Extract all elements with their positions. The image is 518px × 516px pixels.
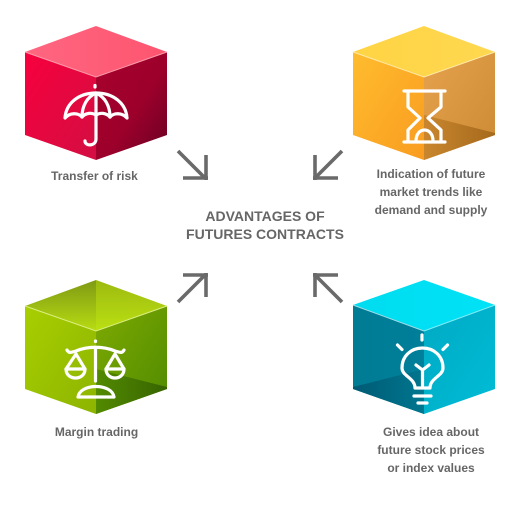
label: gives idea about future stock prices: or index values (387, 461, 475, 475)
icon: umbrella (65, 86, 127, 145)
label: indication of future market trends (375, 167, 488, 217)
arrow: top left (178, 151, 208, 180)
icon: light bulb (398, 335, 448, 403)
icon: hourglass (404, 91, 445, 142)
arrow: bottom right (313, 273, 342, 302)
label: gives idea about future stock prices: future stock prices (377, 443, 485, 457)
cube: gives idea about future stock prices (353, 280, 495, 414)
arrow: top right (313, 151, 342, 180)
title: ADVANTAGES OF (205, 208, 325, 224)
label: transfer of risk: Transfer of risk (51, 169, 138, 183)
label: gives idea about future stock prices (377, 425, 485, 475)
cube: indication of future market trends (353, 26, 495, 160)
label: indication of future market trends: demand and supply (375, 203, 488, 217)
label: margin trading: Margin trading (55, 425, 138, 439)
title: FUTURES CONTRACTS (186, 226, 344, 242)
icon: scales (66, 341, 124, 397)
cube: transfer of risk (25, 26, 167, 160)
label: gives idea about future stock prices: Gives idea about (383, 425, 479, 439)
cube: margin trading (25, 280, 167, 414)
title (186, 208, 344, 242)
label: indication of future market trends: Indication of future (377, 167, 486, 181)
label: indication of future market trends: market trends like (380, 185, 483, 199)
arrow: bottom left (178, 273, 208, 302)
